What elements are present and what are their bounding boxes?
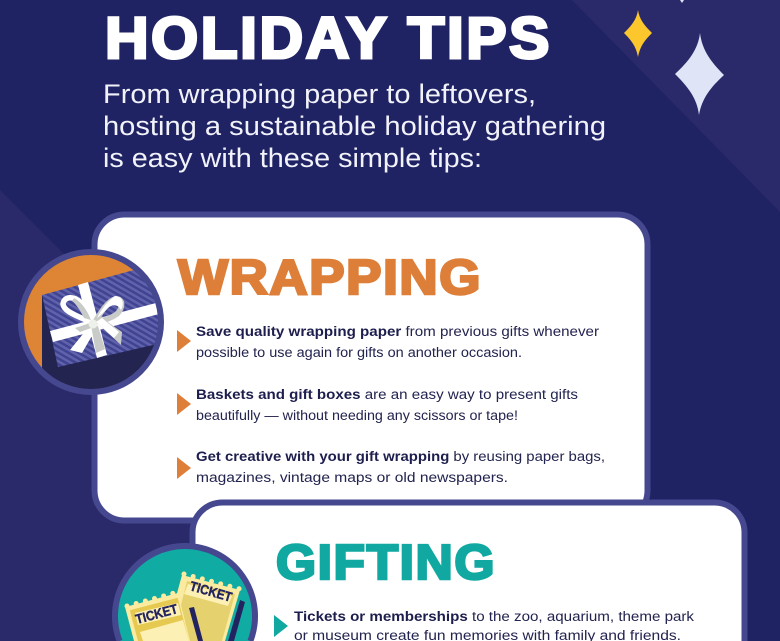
intro text: From wrapping paper to leftovers,: [103, 79, 536, 109]
tip 1: possible to use again for gifts on another occasion.: [196, 345, 522, 361]
icon: tickets: [115, 546, 255, 641]
heading: gifting: GIFTING: [276, 536, 496, 590]
tip 2: [177, 387, 578, 424]
intro text: hosting a sustainable holiday gathering: [103, 111, 606, 141]
panel: gifting: [115, 502, 744, 641]
icon: small sparkle: [680, 0, 684, 3]
tip 1: Save quality wrapping paper from previous gifts whenever: [196, 324, 599, 340]
intro text: [103, 79, 606, 173]
tip 3: Get creative with your gift wrapping by reusing paper bags,: [196, 449, 605, 465]
tip 2: Baskets and gift boxes are an easy way to present gifts: [196, 387, 578, 403]
icon: white star: [675, 33, 724, 115]
back ticket: TICKET: [188, 578, 234, 605]
panel: wrapping: [21, 214, 648, 520]
tip: tickets or memberships: [274, 609, 695, 641]
tip 2: beautifully — without needing any scissors or tape!: [196, 408, 518, 424]
icon: wrapped gift: [21, 252, 170, 395]
tip 3: magazines, vintage maps or old newspapers.: [196, 470, 508, 486]
heading: wrapping: WRAPPING: [178, 251, 482, 305]
tip: tickets or memberships: Tickets or memberships to the zoo, aquarium, theme park: [294, 609, 695, 625]
front ticket shadow: [189, 607, 203, 641]
front ticket: TICKET: [134, 601, 180, 627]
title: HOLIDAY TIPS: [105, 6, 552, 71]
icon: yellow star: [624, 10, 652, 57]
intro text: is easy with these simple tips:: [103, 143, 482, 173]
tip 3: [177, 449, 605, 486]
tip 1: [177, 324, 599, 361]
